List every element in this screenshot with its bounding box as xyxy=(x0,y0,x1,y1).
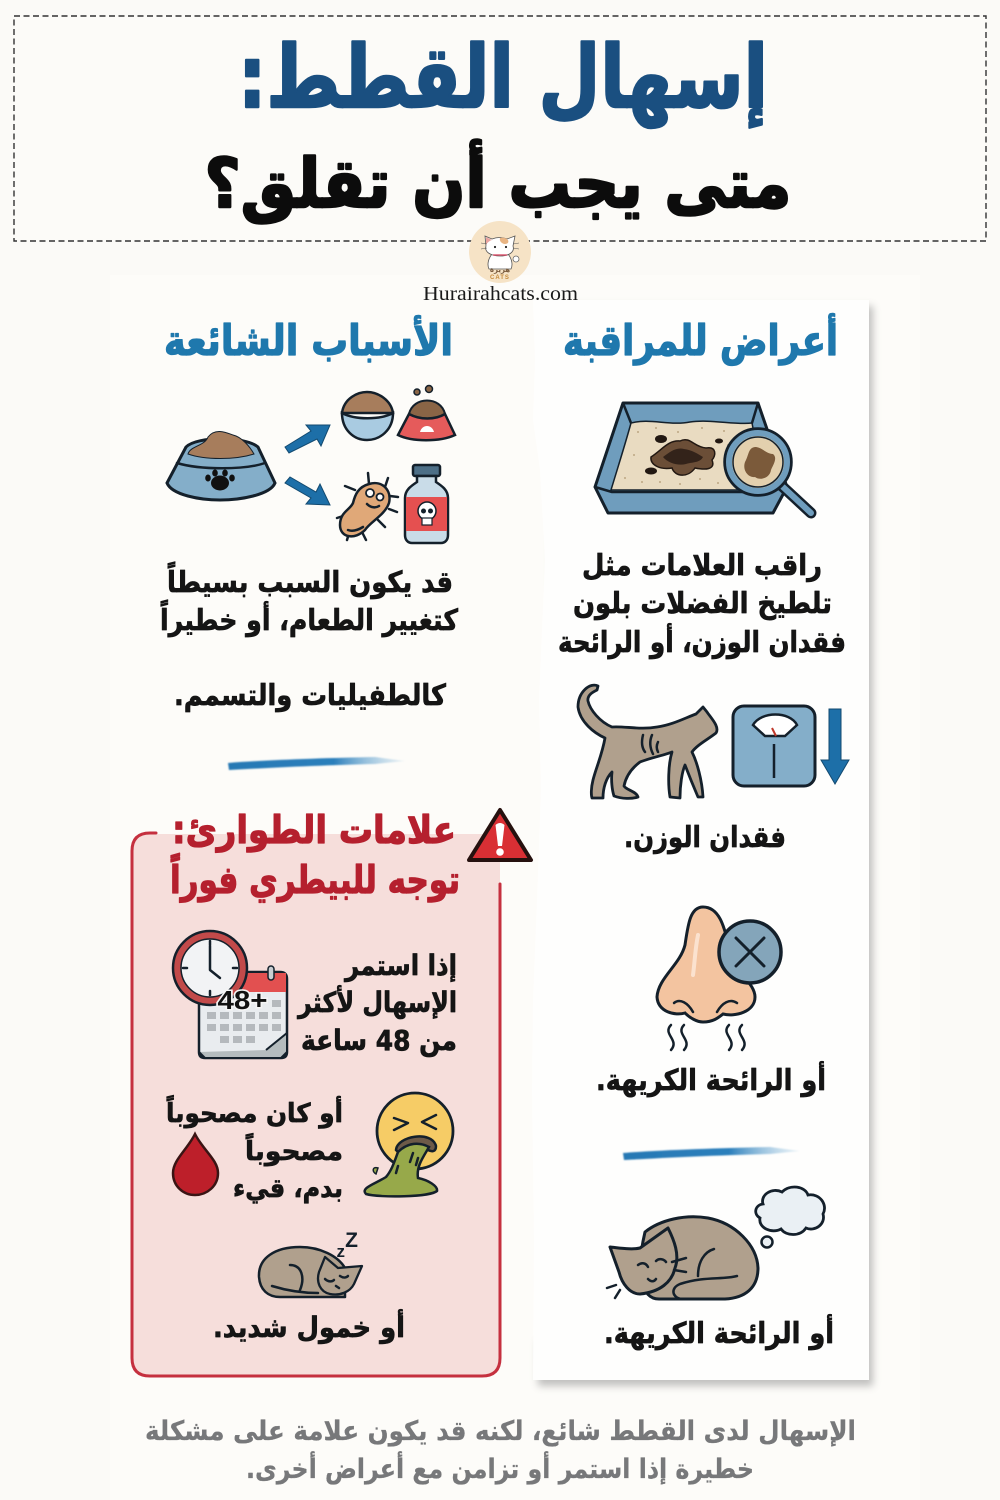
caption: second: أو الرائحة الكريهة. xyxy=(604,1314,834,1350)
icon: scale xyxy=(733,706,815,786)
icon: litter box with magnifier xyxy=(595,403,811,513)
icon: red bowl xyxy=(398,386,455,440)
icon: lethargic cat: z xyxy=(336,1242,345,1261)
icon: clock and calendar: 48+ xyxy=(218,985,268,1015)
heading: common causes: الأسباب الشائعة xyxy=(164,315,453,365)
text: blood and vomit: مصحوباً xyxy=(245,1132,343,1167)
divider xyxy=(623,1147,800,1160)
emergency heading: علامات الطوارئ: xyxy=(172,808,456,852)
panel: common causes xyxy=(160,315,458,712)
icon: clock and calendar xyxy=(173,931,287,1058)
symptoms text: راقب العلامات مثل xyxy=(582,548,822,582)
footer note: الإسهال لدى القطط شائع، لكنه قد يكون علامة على مشكلة xyxy=(145,1416,856,1447)
caption: lethargy: أو خمول شديد. xyxy=(213,1309,405,1344)
emergency heading xyxy=(170,808,460,902)
text: blood and vomit: أو كان مصحوباً xyxy=(166,1094,343,1129)
icon: sleeping cat with thought cloud xyxy=(607,1187,825,1299)
arrow: up xyxy=(285,425,330,453)
text: over 48 hours xyxy=(296,949,457,1057)
title line 2: متى يجب أن تقلق؟ xyxy=(204,139,792,224)
causes text: كتغيير الطعام، أو خطيراً xyxy=(160,600,458,637)
logo xyxy=(469,221,531,283)
emergency heading: توجه للبيطري فوراً xyxy=(170,853,460,902)
causes text: كالطفيليات والتسمم. xyxy=(174,678,446,712)
arrow: down xyxy=(285,477,330,505)
icon: thin cat xyxy=(578,685,717,798)
site name: Hurairahcats.com xyxy=(423,283,578,305)
symptoms text: تلطيخ الفضلات بلون xyxy=(573,586,832,620)
footer note xyxy=(145,1416,856,1485)
icon: warning triangle xyxy=(469,810,531,860)
icon: down arrow xyxy=(821,709,849,784)
icon: lethargic cat: Z xyxy=(345,1229,358,1252)
caption: bad smell: أو الرائحة الكريهة. xyxy=(596,1061,826,1097)
heading: symptoms: أعراض للمراقبة xyxy=(563,313,838,366)
logo: CATS xyxy=(490,275,510,281)
text: blood and vomit: بدم، قيء xyxy=(233,1174,343,1204)
logo: هريرة xyxy=(490,266,510,274)
icon: vomiting face xyxy=(365,1093,453,1196)
icon: blue bowl xyxy=(342,392,393,440)
icon: blood drop xyxy=(173,1134,218,1195)
icon: lethargic cat xyxy=(259,1229,362,1297)
icon: nose xyxy=(657,907,781,1050)
icon: poison bottle xyxy=(405,465,448,543)
divider xyxy=(228,757,405,770)
panel: symptoms xyxy=(532,300,873,1386)
caption: weight loss: فقدان الوزن. xyxy=(624,820,786,854)
icon: food bowl xyxy=(167,431,275,500)
icon: bacteria xyxy=(337,473,398,540)
title line 1: إسهال القطط: xyxy=(238,28,768,129)
text: over 48 hours: الإسهال لأكثر xyxy=(296,985,457,1019)
panel: emergency xyxy=(132,808,531,1376)
text: over 48 hours: من 48 ساعة xyxy=(301,1024,457,1057)
title box xyxy=(14,16,986,241)
symptoms text xyxy=(558,548,846,659)
text: over 48 hours: إذا استمر xyxy=(343,949,457,983)
symptoms text: فقدان الوزن، أو الرائحة xyxy=(558,623,846,659)
causes text xyxy=(160,562,458,712)
text: blood and vomit xyxy=(166,1094,343,1204)
causes text: قد يكون السبب بسيطاً xyxy=(167,562,453,599)
footer note: خطيرة إذا استمر أو تزامن مع أعراض أخرى. xyxy=(246,1451,754,1485)
